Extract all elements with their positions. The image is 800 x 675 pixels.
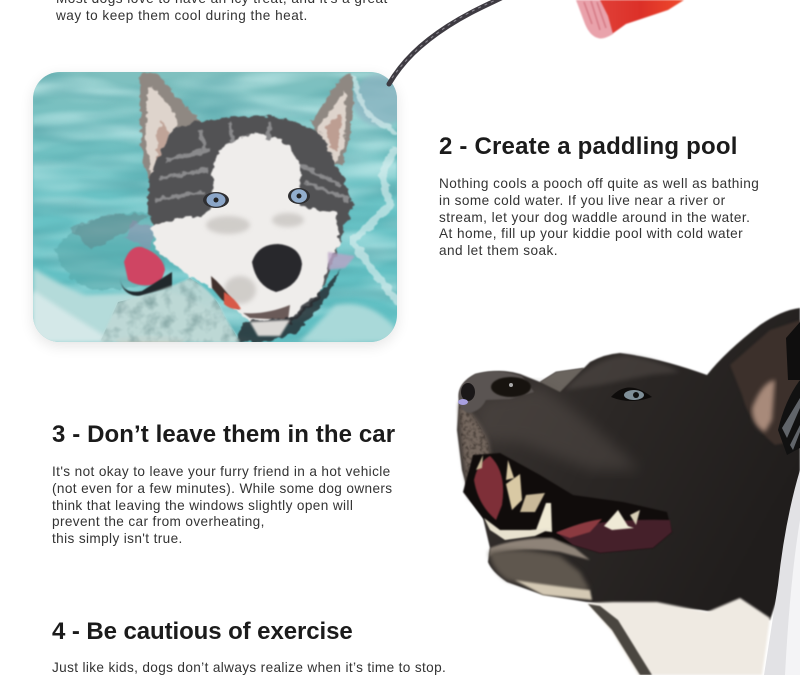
text: tip 3 (52, 464, 392, 546)
text: tip 2: in some cold water. If you live near a river or (439, 193, 726, 208)
splash foam (100, 278, 240, 342)
ears (140, 72, 353, 178)
husky photo shadow (33, 76, 397, 346)
eyes (203, 192, 229, 208)
muzzle speckle (459, 406, 489, 478)
text: tip 1 ending (56, 0, 388, 23)
black head and neck (457, 308, 800, 620)
head dark base (148, 116, 354, 325)
text: tip 3: this simply isn't true. (52, 531, 183, 546)
white face (152, 133, 340, 330)
upper teeth (476, 455, 545, 512)
mouth and tongue (211, 276, 240, 310)
text: tip 4: Just like kids, dogs don’t always realize when it’s time to stop. (52, 660, 446, 675)
text: tip 2: and let them soak. (439, 243, 558, 258)
splash right (352, 78, 397, 300)
nose (459, 371, 534, 413)
text: tip 2: stream, let your dog waddle around in the water. (439, 210, 750, 225)
chin (489, 550, 590, 590)
text: tip 3: think that leaving the windows slightly open will (52, 498, 353, 513)
dark fur streaks (155, 122, 350, 200)
heading: tip 2: 2 - Create a paddling pool (439, 133, 738, 160)
forehead light (565, 355, 680, 390)
ear inner (730, 320, 800, 445)
leash (389, 0, 503, 84)
gum and lower lip (556, 520, 672, 553)
head (148, 116, 354, 330)
text: tip 3: prevent the car from overheating, (52, 514, 265, 529)
text: tip 2: At home, fill up your kiddie pool with cold water (439, 226, 743, 241)
photo: dog looking out of a car (455, 308, 800, 675)
white chest (587, 598, 770, 675)
photo: husky in pool (33, 72, 408, 344)
lower jaw lip (490, 538, 590, 560)
lower left foam (33, 268, 240, 342)
heading: tip 3: 3 - Don’t leave them in the car (52, 421, 395, 448)
lower teeth (484, 503, 640, 540)
mouth interior (463, 453, 672, 553)
muzzle shading (470, 386, 640, 470)
water ripples (33, 72, 397, 342)
ear back patch (540, 368, 584, 392)
text: tip 1 ending: way to keep them cool during the heat. (56, 8, 308, 23)
heading: tip 4: 4 - Be cautious of exercise (52, 618, 353, 645)
text: tip 3: It's not okay to leave your furry friend in a hot vehicle (52, 464, 391, 479)
underwater body (55, 212, 170, 290)
icy treat fragment (576, 0, 684, 38)
text: tip 2: Nothing cools a pooch off quite as well as bathing (439, 176, 759, 191)
soft facial shadows (206, 213, 304, 304)
background right blue haze (354, 74, 397, 126)
red vest (124, 247, 165, 285)
text: tip 3: (not even for a few minutes). While some dog owners (52, 481, 392, 496)
nose (252, 244, 302, 292)
car window post (764, 470, 800, 675)
eye (611, 388, 652, 401)
text: tip 2 (439, 176, 759, 258)
chin and neck (235, 270, 340, 342)
